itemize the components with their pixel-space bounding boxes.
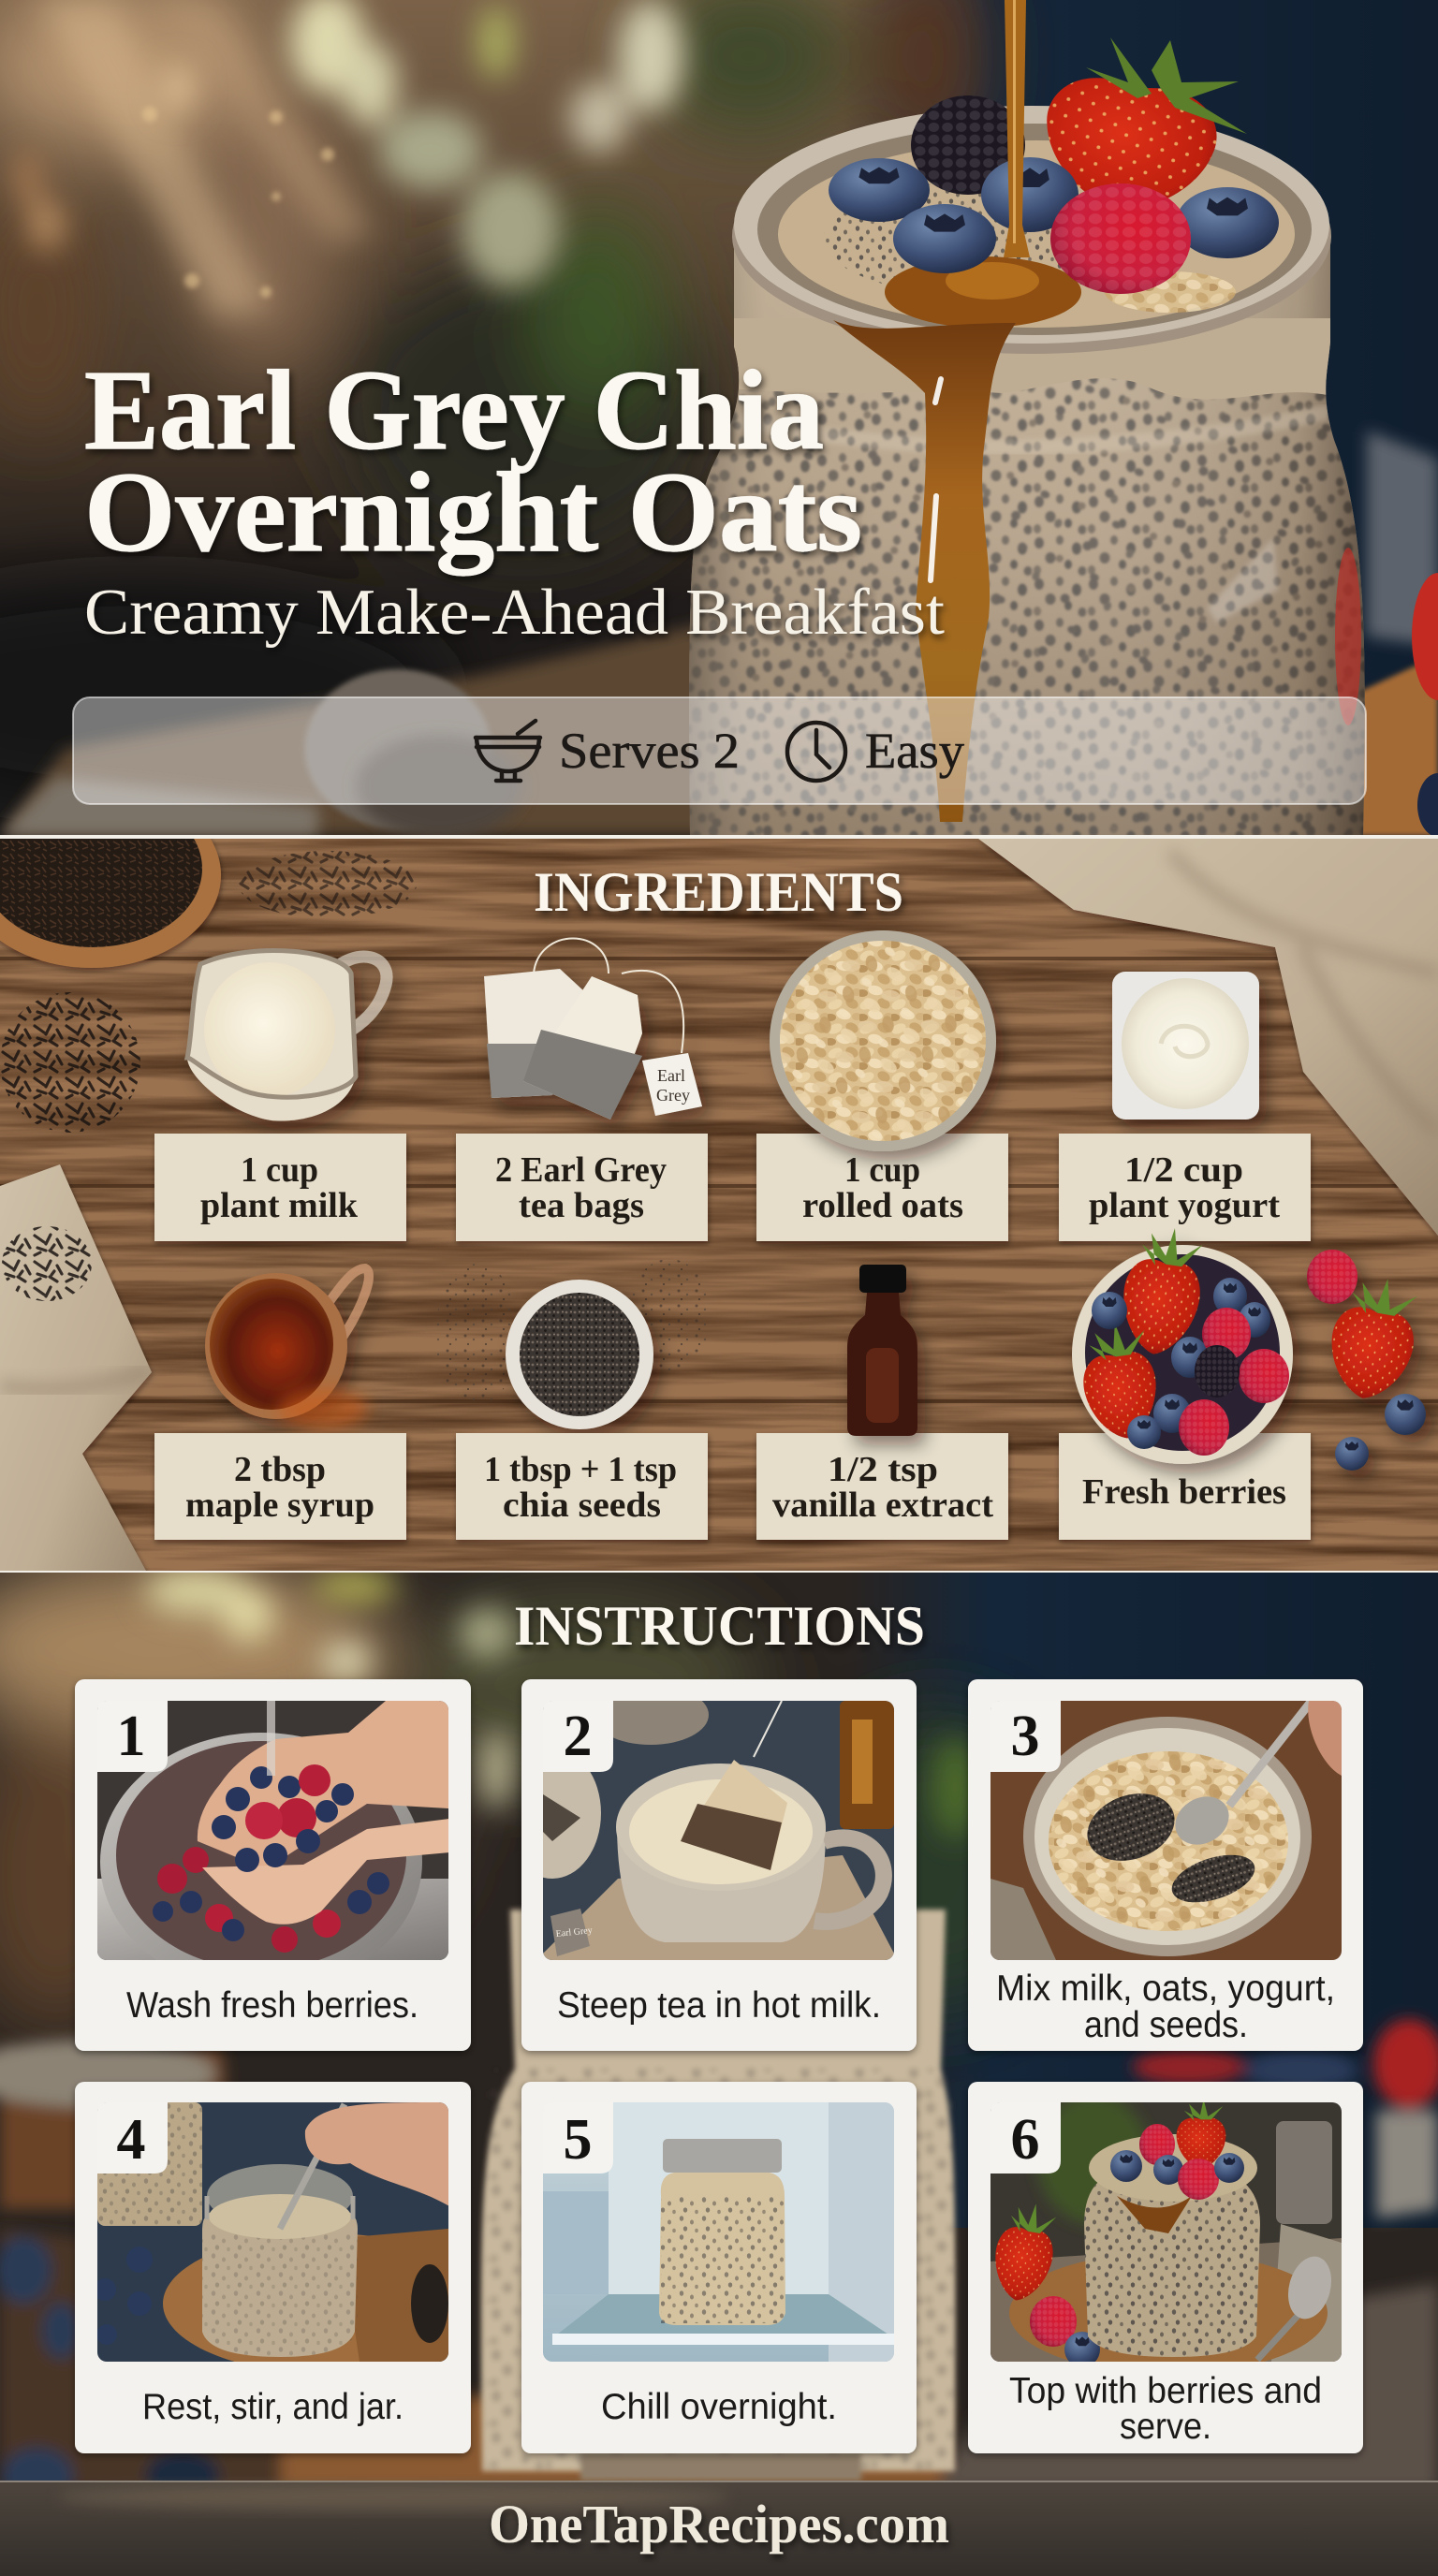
step 4 image: stirring the jar bbox=[94, 2102, 491, 2374]
syrup glow bbox=[278, 1388, 368, 1429]
jug of maple syrup bbox=[205, 1268, 369, 1419]
step 5 number: 5 bbox=[564, 2108, 592, 2172]
linen cloth top right bbox=[978, 839, 1438, 1236]
label: plant yogurt: 1/2 cup bbox=[1124, 1150, 1243, 1190]
step 5 card bbox=[521, 2082, 917, 2453]
bowl of rolled oats bbox=[770, 930, 996, 1151]
separator bbox=[0, 1571, 1438, 1574]
tea tag: Grey bbox=[656, 1086, 690, 1105]
title bbox=[84, 347, 862, 576]
instructions heading: INSTRUCTIONS bbox=[514, 1595, 925, 1657]
label: rolled oats: 1 cup bbox=[844, 1150, 920, 1190]
label: maple syrup: 2 tbsp bbox=[234, 1450, 326, 1489]
light rays bbox=[37, 0, 374, 318]
label: plant yogurt: plant yogurt bbox=[1089, 1186, 1280, 1225]
loose berries bbox=[1307, 1250, 1426, 1471]
step 3 caption: and seeds. bbox=[1084, 2005, 1248, 2045]
icon: mortar bowl bbox=[476, 721, 540, 781]
step 3 caption bbox=[996, 1969, 1335, 2045]
ingredient labels row two bbox=[154, 1433, 1311, 1540]
label: maple syrup: maple syrup bbox=[185, 1486, 374, 1525]
label: plant yogurt bbox=[1089, 1150, 1280, 1225]
step 2 number: 2 bbox=[564, 1705, 592, 1768]
label: chia seeds bbox=[484, 1450, 677, 1525]
label: plant milk: 1 cup bbox=[241, 1150, 318, 1190]
step 6 caption: serve. bbox=[1120, 2407, 1211, 2447]
step 4 number bbox=[97, 2102, 168, 2174]
step 2 image: steeping tea: Earl Grey bbox=[555, 1925, 593, 1939]
wooden table background bbox=[0, 839, 1438, 1573]
step 3 card bbox=[968, 1679, 1363, 2051]
tea tag: Earl bbox=[657, 1066, 685, 1085]
label: tea bags: 2 Earl Grey bbox=[495, 1150, 667, 1190]
tea bags bbox=[484, 938, 702, 1120]
label: chia seeds: chia seeds bbox=[503, 1486, 661, 1525]
step 6 caption bbox=[1009, 2371, 1322, 2447]
step 6 card bbox=[968, 2082, 1363, 2453]
step 3 caption: Mix milk, oats, yogurt, bbox=[996, 1969, 1335, 2009]
jar in fridge bbox=[659, 2139, 785, 2325]
label: rolled oats bbox=[802, 1150, 963, 1225]
jar rim bbox=[732, 222, 1331, 354]
step 1 image: washing berries bbox=[97, 1701, 449, 1991]
upper hand bbox=[198, 1701, 449, 1869]
step 3 image: mixing oats bbox=[990, 1701, 1342, 1960]
label: vanilla extract bbox=[772, 1450, 993, 1525]
label: plant milk bbox=[200, 1150, 359, 1225]
subtitle: Creamy Make-Ahead Breakfast bbox=[84, 577, 946, 649]
tea tag bbox=[642, 1053, 702, 1116]
hero section bbox=[0, 0, 1438, 838]
label: tea bags bbox=[495, 1150, 667, 1225]
serves and difficulty bar bbox=[73, 697, 1366, 804]
step 1 number bbox=[97, 1701, 168, 1772]
bowl of chia seeds bbox=[506, 1280, 653, 1429]
serves label: Serves 2 bbox=[559, 723, 740, 779]
blurred table bbox=[0, 2228, 1438, 2504]
instructions section bbox=[0, 1554, 1438, 2576]
honey drip bbox=[833, 320, 1016, 822]
step 1 card bbox=[75, 1679, 471, 2051]
step 3 number: 3 bbox=[1011, 1705, 1039, 1768]
tea leaf bowl bbox=[0, 783, 221, 968]
bowl of fresh berries bbox=[1072, 1222, 1293, 1464]
label: fresh berries: Fresh berries bbox=[1082, 1472, 1286, 1512]
blurred jar backdrop bbox=[481, 1910, 956, 2481]
scattered tea leaves bbox=[0, 851, 417, 1301]
berries on top bbox=[829, 37, 1279, 294]
step 4 number: 4 bbox=[116, 2108, 146, 2172]
footer band bbox=[0, 2481, 1438, 2576]
linen cloth lower left bbox=[0, 1164, 152, 1573]
step 2 image: steeping tea bbox=[504, 1685, 894, 1960]
lower hand bbox=[202, 1819, 449, 1925]
blurred bowl and berries backdrop bbox=[0, 2019, 1438, 2218]
honey stream bbox=[1004, 0, 1030, 257]
easy label: Easy bbox=[865, 723, 964, 779]
label: tea bags: tea bags bbox=[519, 1186, 644, 1225]
label: vanilla extract: 1/2 tsp bbox=[828, 1450, 938, 1489]
step 3 number bbox=[990, 1701, 1061, 1772]
separator bbox=[0, 835, 1438, 840]
oat surface bbox=[778, 140, 1295, 328]
ingredients heading: INGREDIENTS bbox=[534, 861, 903, 923]
step 1 caption: Wash fresh berries. bbox=[126, 1985, 418, 2026]
vanilla extract bottle bbox=[847, 1265, 917, 1436]
honey pool bbox=[885, 256, 1081, 328]
ingredient labels row one bbox=[154, 1134, 1311, 1241]
step 1 number: 1 bbox=[116, 1705, 146, 1768]
step 2 card bbox=[504, 1679, 917, 2051]
footer website: OneTapRecipes.com bbox=[489, 2494, 949, 2554]
step 6 number bbox=[990, 2102, 1061, 2174]
jar of overnight oats bbox=[683, 0, 1367, 836]
instructions blurred background bbox=[0, 1554, 1438, 2576]
label: chia seeds: 1 tbsp + 1 tsp bbox=[484, 1450, 677, 1489]
step 4 caption: Rest, stir, and jar. bbox=[142, 2387, 404, 2427]
title: Overnight Oats bbox=[84, 449, 862, 576]
step 4 card bbox=[75, 2082, 491, 2453]
label: rolled oats: rolled oats bbox=[802, 1186, 963, 1225]
step 5 number bbox=[543, 2102, 613, 2174]
label: maple syrup bbox=[185, 1450, 374, 1525]
wooden table and spoon bbox=[0, 431, 1438, 838]
label: plant milk: plant milk bbox=[200, 1186, 359, 1225]
title: Earl Grey Chia bbox=[84, 347, 824, 474]
icon: clock bbox=[787, 723, 845, 781]
hero blurred background bbox=[0, 0, 1438, 836]
step 2 caption: Steep tea in hot milk. bbox=[557, 1985, 881, 2026]
ingredients section bbox=[0, 783, 1438, 1573]
yogurt cup bbox=[1112, 972, 1259, 1120]
step 6 caption: Top with berries and bbox=[1009, 2371, 1322, 2411]
jar with glass top bbox=[207, 2164, 353, 2228]
step 5 image: chilling in the fridge bbox=[543, 2102, 894, 2362]
step 6 image: served jar bbox=[988, 2093, 1342, 2374]
scattered chia seeds bbox=[435, 1259, 712, 1404]
step 5 caption: Chill overnight. bbox=[601, 2387, 837, 2427]
measuring jug of milk bbox=[187, 951, 387, 1120]
step 6 number: 6 bbox=[1011, 2108, 1039, 2172]
step 2 number bbox=[543, 1701, 613, 1772]
label: vanilla extract: vanilla extract bbox=[772, 1486, 993, 1525]
